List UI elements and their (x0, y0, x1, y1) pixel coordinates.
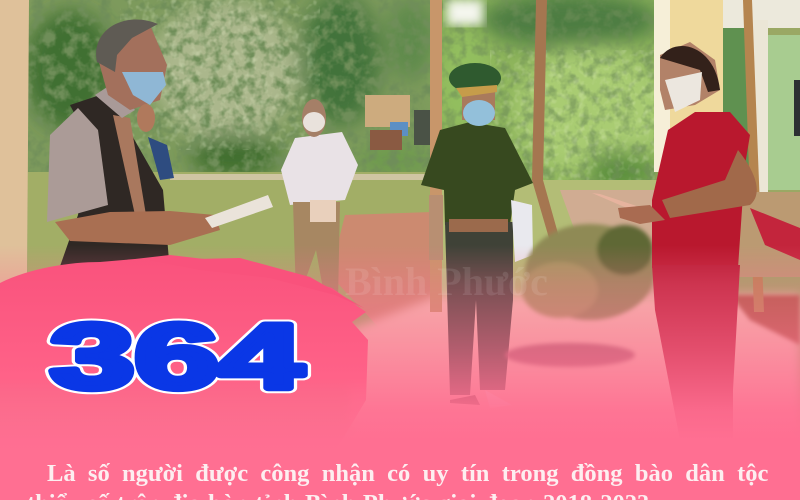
grass and ground (28, 172, 432, 300)
faint watermark: Bình Phước (345, 259, 548, 304)
building far (365, 95, 410, 127)
person: soldier (421, 63, 533, 408)
person: woman in red (592, 42, 757, 440)
big number 364: 364 (50, 304, 303, 408)
bush by the pole (505, 224, 655, 367)
ground under overlay (350, 295, 800, 450)
person: man behind in blue (137, 104, 174, 180)
wooden poles and right pillar (430, 0, 800, 312)
caption text (27, 460, 769, 500)
big number 364: 364 (50, 304, 303, 408)
person: man in white shirt (281, 99, 358, 300)
caption text: Là số người được công nhận có uy tín trong đồng bào dân tộc (47, 460, 769, 487)
pillar left (0, 0, 29, 285)
person: man in traditional vest (47, 19, 273, 272)
pink brush stroke (0, 255, 368, 460)
pink gradient overlay (0, 245, 800, 440)
